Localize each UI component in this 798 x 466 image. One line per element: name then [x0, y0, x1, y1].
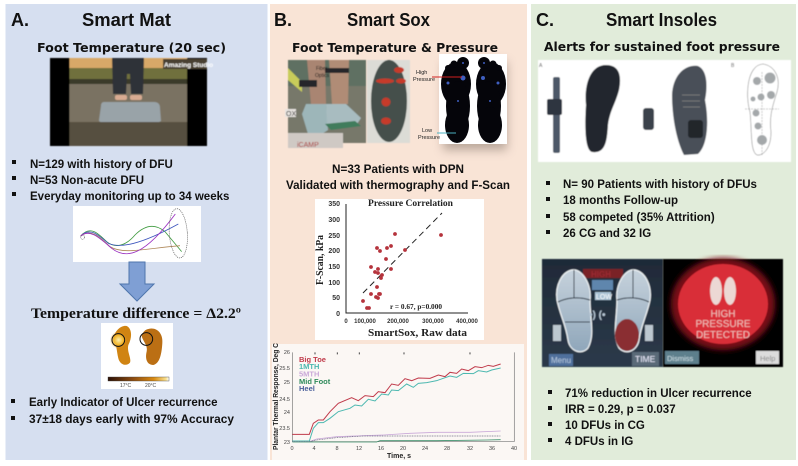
bullet list: insole outcomes — [548, 388, 752, 448]
chart: plantar thermal response: 16 — [378, 446, 384, 452]
heading: B. Smart Sox: B. — [274, 10, 292, 30]
pressure map: footprints — [439, 54, 507, 150]
chart: plantar thermal response: 25.5 — [279, 366, 290, 372]
heading: A. Smart Mat — [11, 10, 171, 30]
screen: pressure display: •) (• — [589, 310, 606, 321]
chart: plantar thermal response: 26 — [284, 350, 290, 356]
chart: pressure correlation scatter: 100 — [328, 280, 340, 287]
heading: C. Smart Insoles: C. — [536, 10, 554, 30]
chart: plantar thermal response: 36 — [489, 446, 495, 452]
bullet list: insole study — [546, 179, 757, 240]
chart: plantar thermal response: 32 — [467, 446, 473, 452]
chart: plantar thermal response: 25 — [284, 380, 290, 386]
photo: watch, insole, sensor, shoe and sensor map: B — [731, 63, 735, 69]
arrow: down — [120, 262, 154, 301]
photo: watch, insole, sensor, shoe and sensor map — [538, 60, 791, 162]
heading: A. Smart Mat: A. — [11, 10, 29, 30]
screen: high pressure detected alert — [663, 258, 783, 367]
panel: Smart Sox — [270, 4, 527, 460]
icon: grey shoe — [672, 66, 707, 155]
bullet list: insole study: N= 90 Patients with history of DFUs — [563, 179, 757, 191]
study description — [286, 164, 510, 192]
screen: high pressure detected alert: Help — [760, 354, 775, 363]
chart: pressure correlation scatter: 0 — [344, 319, 348, 325]
bullet list: mat outcomes — [11, 397, 235, 426]
chart: plantar thermal response: Plantar Thermal Response, Deg C — [273, 343, 280, 450]
chart: pressure correlation scatter: Pressure Correlation — [368, 198, 453, 208]
screen: pressure display — [542, 259, 663, 367]
chart: plantar thermal response: 5MTH — [299, 370, 319, 378]
photo: sock on foot: Fiber — [316, 66, 328, 72]
heading: A. Smart Mat: Smart Mat — [82, 10, 171, 30]
photo: insole with red pressure zones — [367, 60, 410, 143]
bullet list: insole outcomes: 71% reduction in Ulcer recurrence — [565, 388, 752, 400]
chart: pressure correlation scatter: 150 — [328, 264, 340, 271]
thermogram: plantar feet — [101, 323, 173, 389]
bullet list: insole study: 26 CG and 32 IG — [563, 228, 651, 240]
chart: plantar thermal response: 20 — [400, 446, 406, 452]
labels: high and low pressure: Pressure — [418, 135, 440, 141]
icon: sensor pod — [643, 108, 654, 130]
chart: pressure correlation scatter: 0 — [336, 311, 340, 318]
bullet list: insole study: 18 months Follow-up — [563, 195, 678, 207]
chart: plantar thermal response: 40 — [511, 446, 517, 452]
chart: plantar thermal response: 24 — [284, 410, 290, 416]
chart: pressure correlation scatter: r = 0.67, p=0.000 — [390, 303, 443, 311]
chart: plantar thermal response: Heel — [299, 384, 315, 393]
heading: C. Smart Insoles — [536, 10, 717, 30]
chart: plantar thermal response: 4 — [312, 446, 316, 452]
icon: smartwatch — [547, 77, 562, 153]
screen: high pressure detected alert: DETECTED — [696, 330, 750, 341]
bullet list: mat study population: N=129 with history of DFU — [30, 159, 173, 171]
result: temperature difference: Temperature difference = Δ2.2º — [31, 306, 241, 322]
subheading: foot temperature: Foot Temperature (20 sec) — [37, 40, 226, 55]
photo: sock on foot: Optics — [315, 73, 330, 79]
chart: plantar thermal response: 1MTH — [299, 362, 319, 371]
chart: temperature curves — [73, 206, 201, 262]
icon: black insole — [585, 65, 620, 152]
panel: Smart Insoles — [531, 4, 796, 460]
chart: pressure correlation scatter: 100,000 — [354, 319, 376, 325]
screen: high pressure detected alert: HIGH — [710, 309, 736, 320]
bullet list: mat study population — [12, 159, 229, 203]
photo: sock on foot: iCAMP — [297, 142, 319, 149]
bullet list: mat outcomes: 37±18 days early with 97% Accuracy — [29, 414, 235, 426]
chart: plantar thermal response: 23 — [284, 440, 290, 446]
photo: watch, insole, sensor, shoe and sensor map: A — [539, 63, 543, 69]
chart: pressure correlation scatter: 200,000 — [387, 319, 410, 325]
chart: plantar thermal response: 24.5 — [279, 397, 290, 403]
study description: Validated with thermography and F-Scan — [286, 180, 510, 192]
labels: high and low pressure: Low — [422, 128, 432, 134]
icon: sensor map outline — [745, 64, 779, 156]
chart: pressure correlation scatter: 400,000 — [456, 319, 478, 325]
photo: sock on foot — [285, 60, 366, 149]
bullet list: mat study population: N=53 Non-acute DFU — [30, 175, 144, 187]
chart: plantar thermal response: 28 — [444, 446, 450, 452]
thermogram: plantar feet: 20°C — [145, 383, 157, 389]
chart: plantar thermal response: 8 — [335, 446, 339, 452]
chart: pressure correlation scatter: 200 — [328, 248, 340, 255]
icon: left foot outline — [557, 270, 592, 352]
chart: plantar thermal response: Time, s — [387, 451, 411, 460]
chart: plantar thermal response: 0 — [290, 446, 294, 452]
chart: plantar thermal response: 24 — [422, 446, 428, 452]
photo: sock on foot: OX — [286, 111, 296, 118]
chart: plantar thermal response: 12 — [356, 446, 362, 452]
labels: high and low pressure — [413, 70, 462, 141]
photo: person standing on mat — [50, 58, 213, 146]
thermogram: plantar feet: 17°C — [120, 383, 132, 389]
chart: pressure correlation scatter: SmartSox, Raw data — [368, 328, 467, 339]
chart: plantar thermal response: Mid Foot — [299, 377, 331, 386]
photo: person standing on mat: Amazing Studio — [164, 62, 213, 69]
screen: high pressure detected alert: PRESSURE — [696, 319, 751, 330]
bullet list: insole study: 58 competed (35% Attrition) — [563, 212, 715, 224]
bullet list: insole outcomes: 10 DFUs in CG — [565, 420, 645, 432]
bullet list: mat outcomes: Early Indicator of Ulcer recurrence — [29, 397, 218, 409]
chart: plantar thermal response: Big Toe — [299, 355, 326, 364]
screen: pressure display: LOW — [596, 294, 612, 301]
bullet list: insole outcomes: IRR = 0.29, p = 0.037 — [565, 404, 676, 416]
icon: right foot outline — [615, 270, 650, 352]
labels: high and low pressure: High — [416, 70, 427, 76]
chart: pressure correlation scatter: 300 — [328, 217, 340, 224]
bullet list: mat study population: Everyday monitoring up to 34 weeks — [30, 191, 229, 203]
chart: pressure correlation scatter — [315, 198, 484, 340]
bullet list: insole outcomes: 4 DFUs in IG — [565, 436, 633, 448]
screen: pressure display: HIGH — [591, 270, 611, 279]
chart: plantar thermal response: 23.5 — [279, 426, 290, 432]
chart: pressure correlation scatter: 50 — [332, 295, 340, 302]
chart: pressure correlation scatter: 350 — [328, 201, 340, 208]
subheading: alerts: Alerts for sustained foot pressure — [544, 39, 780, 54]
chart: pressure correlation scatter: F-Scan, kPa — [315, 235, 326, 285]
screen: pressure display: Menu — [551, 356, 571, 365]
screen: high pressure detected alert: Dismiss — [667, 354, 693, 363]
chart: plantar thermal response — [272, 343, 524, 460]
heading: C. Smart Insoles: Smart Insoles — [606, 10, 717, 30]
chart: pressure correlation scatter: 300,000 — [422, 319, 444, 325]
heading: B. Smart Sox — [274, 10, 430, 30]
labels: high and low pressure: Pressure — [413, 77, 435, 83]
study description: N=33 Patients with DPN — [332, 164, 464, 176]
screen: pressure display: TIME — [635, 354, 656, 364]
panel: Smart Mat — [6, 4, 268, 460]
heading: B. Smart Sox: Smart Sox — [347, 10, 430, 30]
subheading: foot temperature and pressure: Foot Temperature & Pressure — [292, 40, 498, 55]
chart: pressure correlation scatter: 250 — [328, 233, 340, 240]
